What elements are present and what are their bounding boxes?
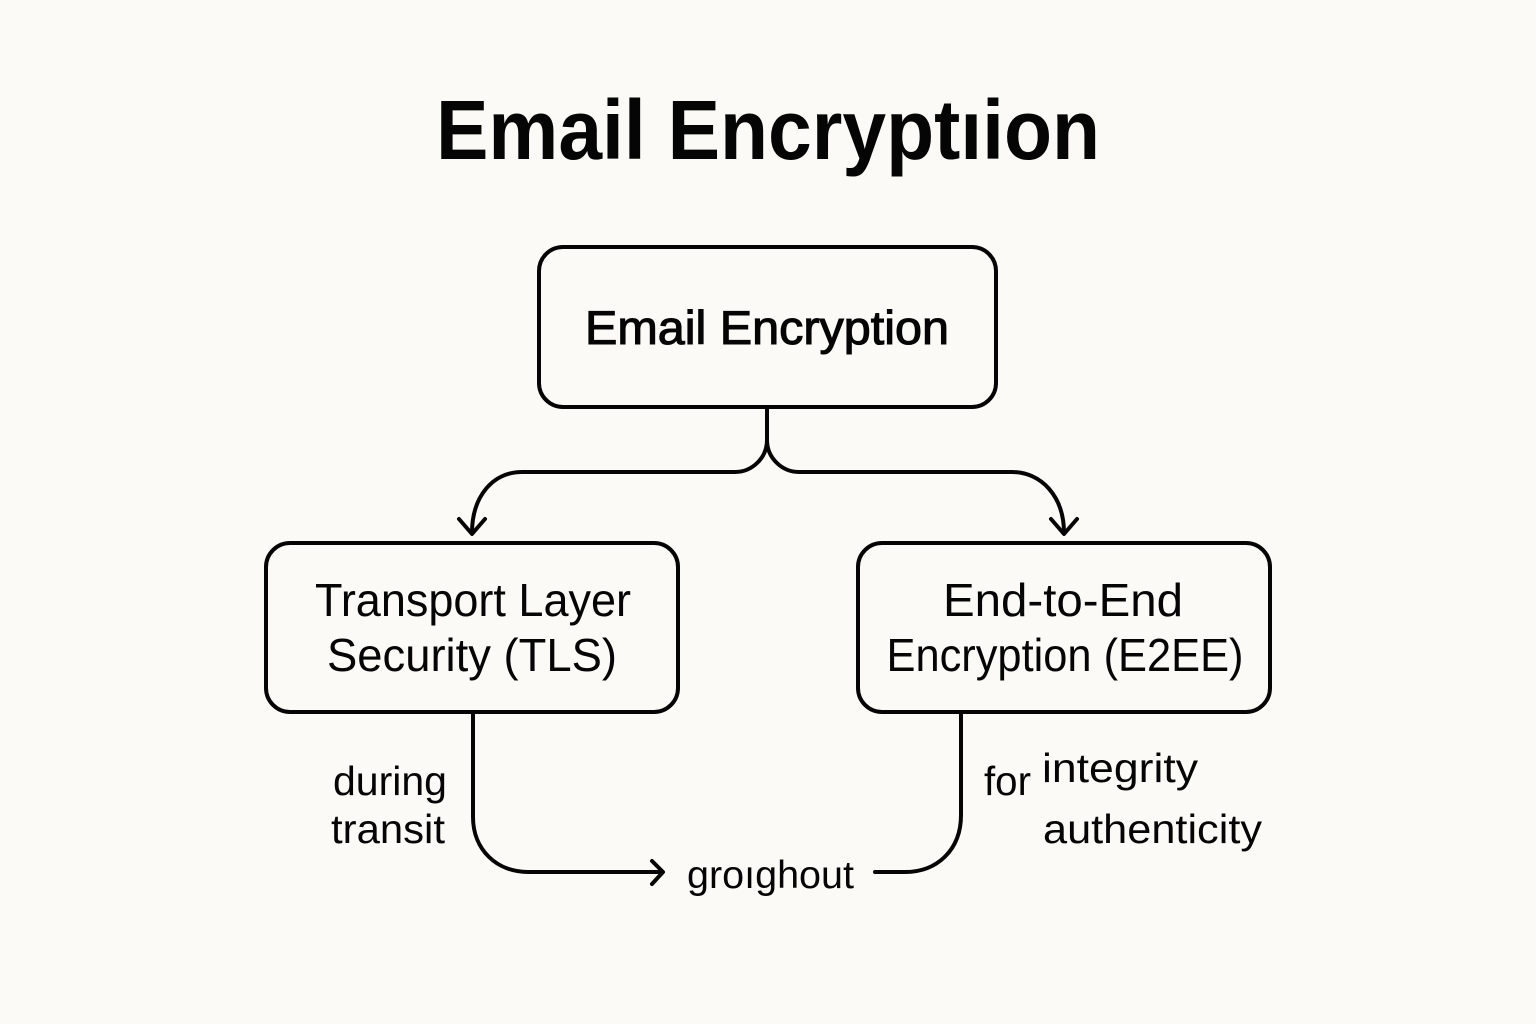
label: authenticity: authenticity xyxy=(1043,806,1263,852)
arrow: connector to TLS xyxy=(459,407,767,534)
label: for: for xyxy=(984,758,1031,804)
arrow: TLS to throughout xyxy=(473,712,663,884)
box: TLS: Security (TLS) xyxy=(327,629,617,681)
box: TLS xyxy=(266,543,678,712)
box: E2EE: Encryption (E2EE) xyxy=(886,629,1244,681)
box: Email Encryption: Email Encryption xyxy=(585,301,949,354)
label: during transit xyxy=(331,758,447,852)
label: integrity: integrity xyxy=(1042,745,1199,791)
box: TLS: Transport Layer xyxy=(315,574,631,626)
title: Email Encryptıion xyxy=(436,83,1100,177)
label: during transit: during xyxy=(333,758,447,804)
box: E2EE: End-to-End xyxy=(943,574,1183,626)
connector: E2EE to throughout xyxy=(875,712,961,872)
label: groighout: groıghout xyxy=(687,854,854,897)
arrow: connector to E2EE xyxy=(767,440,1077,534)
label: during transit: transit xyxy=(331,806,446,852)
box: Email Encryption xyxy=(539,247,996,407)
box: E2EE xyxy=(858,543,1270,712)
